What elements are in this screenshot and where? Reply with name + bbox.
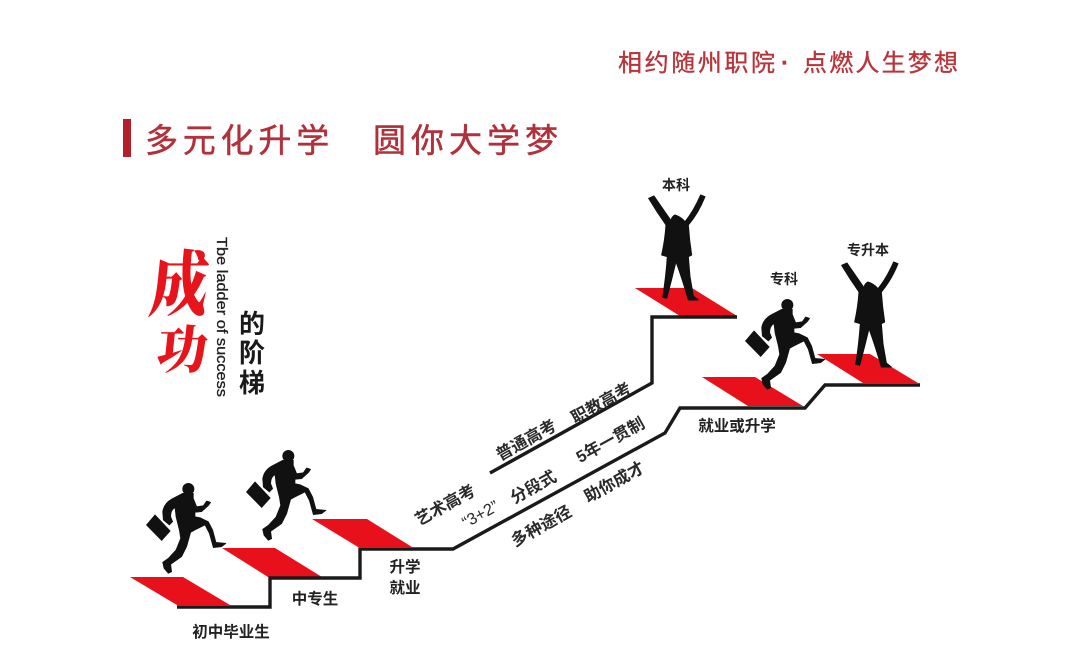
stage labels: 就业或升学 — [698, 416, 776, 435]
slogan top right: 点燃人生梦想 — [803, 50, 960, 77]
slogan top right: 相约随州职院 — [618, 50, 778, 77]
ladder title block: 阶 — [239, 338, 265, 368]
stage labels: 升学 — [389, 557, 421, 576]
figure: runner 2 — [246, 450, 326, 540]
ladder title block: 功 — [153, 309, 212, 383]
figure: runner 1 — [146, 483, 226, 573]
stage labels — [192, 177, 889, 641]
slanted route labels: “3+2” — [459, 497, 502, 532]
heading: 圆你大学梦 — [373, 122, 563, 159]
figure: standing upgrade — [842, 262, 898, 367]
staircase upper line — [490, 317, 737, 473]
red step treads — [130, 288, 918, 605]
slanted route labels — [411, 378, 648, 550]
slanted route labels: 职教高考 — [567, 378, 635, 427]
ladder title block: 成 — [146, 228, 215, 331]
ladder title block: 梯 — [239, 368, 265, 398]
stage labels: 中专生 — [292, 590, 338, 608]
stage labels: 专升本 — [847, 242, 889, 258]
ladder title block: Tbe ladder of success — [213, 237, 229, 397]
heading: 多元化升学 — [145, 122, 334, 159]
ladder title block: 的 — [239, 309, 265, 339]
stage labels: 初中毕业生 — [192, 622, 270, 641]
ladder title block — [146, 228, 265, 398]
stage labels: 就业 — [389, 578, 421, 597]
stage labels: 本科 — [662, 177, 690, 193]
slanted route labels: 分段式 — [507, 466, 560, 507]
slanted route labels: 艺术高考 — [411, 480, 479, 529]
slanted route labels: 多种途径 — [507, 501, 575, 550]
slogan top right — [618, 50, 960, 77]
figure: runner 3 — [745, 299, 825, 389]
slanted route labels: 5年一贯制 — [572, 413, 648, 467]
figure: standing bachelor — [649, 195, 705, 300]
slanted route labels: 助你成才 — [580, 457, 648, 506]
slanted route labels: 普通高考 — [492, 415, 560, 464]
staircase lower line — [177, 385, 920, 607]
stage labels: 专科 — [770, 271, 798, 287]
slogan top right: · — [781, 50, 789, 77]
heading — [123, 119, 563, 159]
